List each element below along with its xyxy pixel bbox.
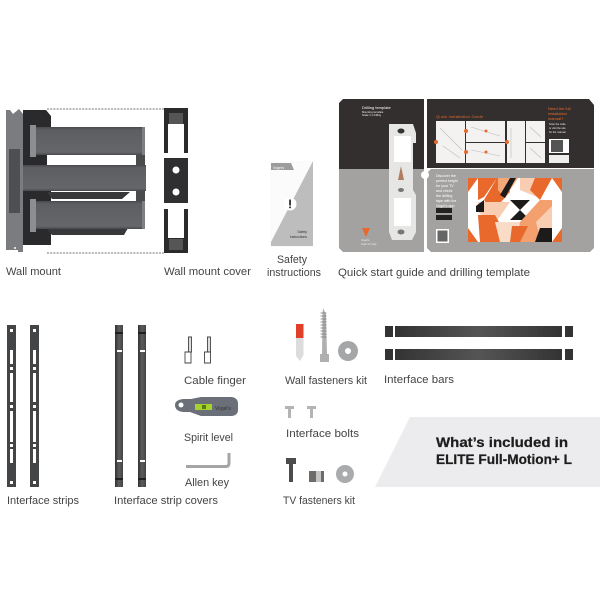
- quick start guide and drilling template: Vogel's: [361, 238, 370, 242]
- quick start guide and drilling template: Scale 1:1 drilling: [362, 113, 382, 117]
- safety instructions booklet: Safety: [297, 230, 307, 234]
- discover text: Vogel's app: [436, 204, 454, 208]
- cable fingers: [185, 337, 210, 363]
- right cover: [138, 325, 146, 487]
- safety instructions label: [267, 254, 321, 279]
- quick start guide and drilling template: Drilling template: [362, 105, 391, 110]
- left strip: [7, 325, 16, 487]
- title banner: ELITE Full-Motion+ L: [436, 451, 572, 467]
- allen key label: Allen key: [185, 477, 229, 489]
- geometric artwork: [468, 178, 562, 242]
- interface bars: [385, 326, 573, 360]
- quick start guide and drilling template: or visit the site: [549, 126, 566, 130]
- discover text: perfect height: [436, 179, 458, 183]
- wall plug: [296, 324, 304, 338]
- top arm: [30, 127, 145, 155]
- middle arm: [23, 165, 146, 191]
- rear bracket: [23, 110, 51, 245]
- wall mount: [6, 109, 164, 253]
- wall fasteners kit: [296, 308, 358, 362]
- bottom bar: [395, 349, 562, 360]
- dashed guide lines: [47, 109, 164, 253]
- tv fasteners kit label: TV fasteners kit: [283, 495, 355, 507]
- quick start guide and drilling template: installation: [548, 111, 567, 116]
- arm end highlights: [142, 127, 145, 229]
- safety instructions booklet: Vogel's: [273, 166, 284, 170]
- wall mount label: Wall mount: [6, 266, 61, 278]
- safety instructions booklet: instructions: [290, 235, 307, 239]
- spirit level: [175, 397, 238, 416]
- interface bolts: [285, 406, 316, 418]
- washer: [338, 341, 358, 361]
- discover text: the drilling: [436, 194, 452, 198]
- interface strip covers label: Interface strip covers: [114, 495, 219, 507]
- safety instructions booklet: [270, 161, 313, 247]
- wall fasteners kit label: Wall fasteners kit: [285, 375, 367, 387]
- logo: [362, 228, 370, 237]
- quick start guide and drilling template: [339, 99, 594, 252]
- interface strips label: Interface strips: [7, 495, 79, 507]
- interface bolts label: Interface bolts: [286, 428, 360, 440]
- quick start guide and drilling template: Need the full: [548, 106, 571, 111]
- app store badges: [436, 208, 452, 213]
- left cover: [115, 325, 123, 487]
- right strip: [30, 325, 39, 487]
- spacer: [309, 471, 324, 482]
- quick start guide label: Quick start guide and drilling template: [338, 267, 530, 279]
- discover text: tape with the: [436, 199, 456, 203]
- title: What’s included in: [436, 434, 568, 450]
- centre cover piece: [164, 158, 188, 203]
- orange heading: Quick installation Guide: [436, 114, 484, 119]
- end caps: [385, 326, 573, 360]
- interface strips: [7, 325, 39, 487]
- right panel: [427, 99, 594, 168]
- wall mount cover label: Wall mount cover: [164, 266, 251, 278]
- drilling template strip: [389, 124, 416, 240]
- discover text: for your TV: [436, 184, 454, 188]
- safety instructions label: Safety: [277, 254, 307, 266]
- allen key: [186, 453, 229, 466]
- quick start guide and drilling template: Scan the code: [549, 122, 566, 126]
- discover text: [436, 174, 458, 208]
- spirit level: Vogel's: [215, 406, 231, 412]
- tv fasteners kit: [286, 458, 354, 483]
- wall plate: [6, 109, 23, 252]
- instruction steps: [436, 121, 545, 163]
- tv bolt: [286, 458, 296, 482]
- left panel: [339, 99, 424, 169]
- qr code panel: [549, 139, 569, 153]
- fold notch: [421, 171, 429, 179]
- lower shadow arm: [46, 192, 130, 235]
- cable finger label: Cable finger: [184, 375, 246, 387]
- interface strip covers: [115, 325, 146, 487]
- title banner: [375, 417, 600, 487]
- wall screw: [320, 308, 329, 362]
- discover text: and check: [436, 189, 453, 193]
- washer: [336, 465, 354, 483]
- top bar: [395, 326, 562, 337]
- app qr code: [436, 229, 449, 243]
- quick start guide and drilling template: Mounting template: [362, 110, 384, 114]
- safety instructions label: instructions: [267, 267, 321, 279]
- wall mount cover: [164, 108, 188, 253]
- top cover piece: [164, 108, 188, 153]
- quick start guide and drilling template: manual?: [548, 116, 564, 121]
- discover text: Discover the: [436, 174, 456, 178]
- bottom arm: [30, 201, 145, 229]
- spirit level label: Spirit level: [184, 432, 233, 444]
- quick start guide and drilling template: Scan for help: [361, 242, 377, 246]
- quick start guide and drilling template: for the manual: [549, 130, 566, 134]
- interface bars label: Interface bars: [384, 374, 455, 386]
- bottom cover piece: [164, 209, 188, 253]
